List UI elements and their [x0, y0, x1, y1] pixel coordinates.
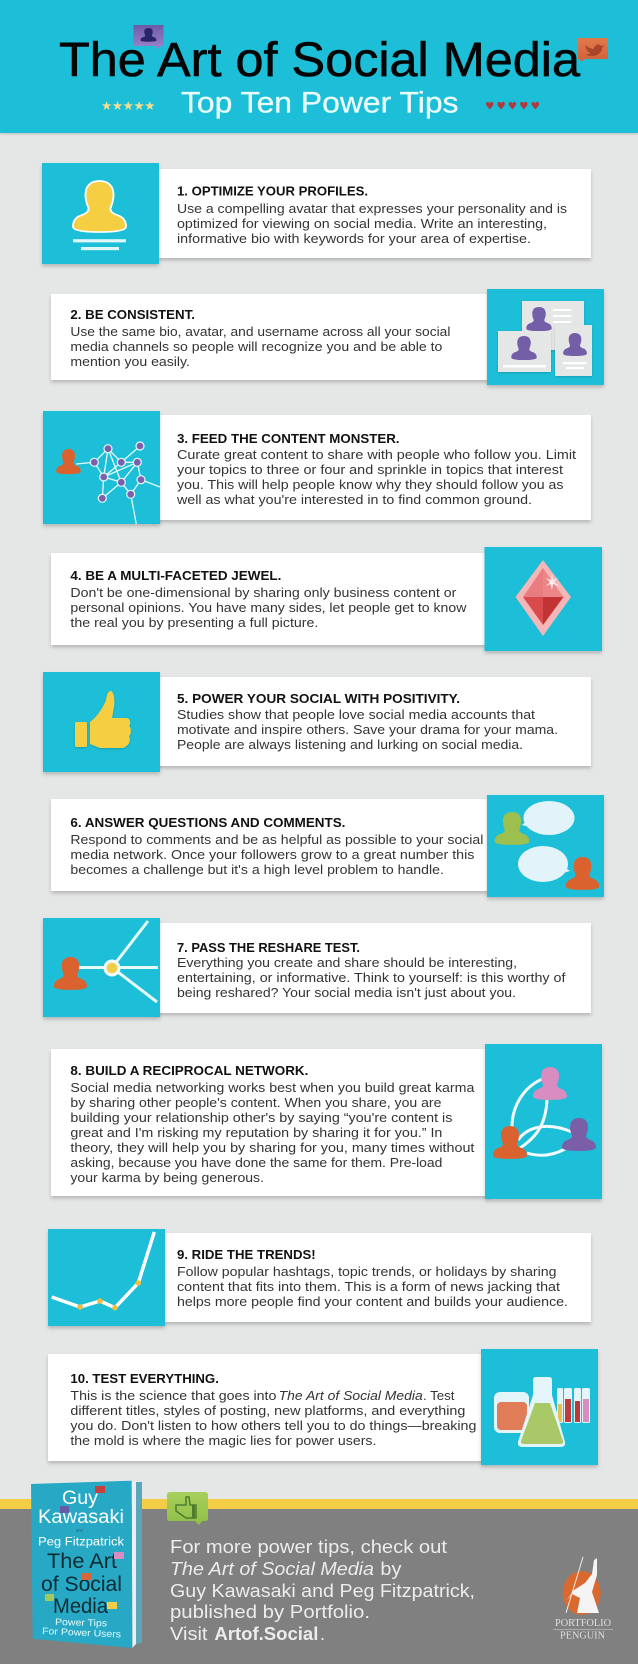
heading: tip 9: 9. RIDE THE TRENDS! [177, 1247, 316, 1262]
text: tip 2 body: media channels so people will recognize you and be able to [70, 339, 442, 354]
text: footer call to action: For more power tips, check out [170, 1537, 447, 1557]
text: tip 9 body: helps more people find your content and builds your audience. [177, 1294, 568, 1309]
text: tip 7 body [177, 955, 566, 1000]
book cover: Media [53, 1595, 108, 1618]
text: tip 8 body: by sharing other people's content. When you share, you are [70, 1095, 441, 1110]
text: footer call to action: . [320, 1624, 325, 1644]
icon: green thumbs-up bubble [167, 1492, 208, 1525]
text: tip 9 body: content that fits into them. This is a form of news jacking that [177, 1279, 560, 1294]
text: tip 10 body: the mold is where the magic lies for power users. [70, 1433, 376, 1448]
panel: footer [0, 1481, 638, 1664]
subtitle: Top Ten Power Tips [181, 86, 458, 120]
icon: jewel [516, 560, 571, 636]
text: tip 5 body: motivate and inspire others. Save your drama for your mama. [177, 722, 558, 737]
logo: Portfolio Penguin: PORTFOLIO [555, 1618, 611, 1629]
heading: tip 3: 3. FEED THE CONTENT MONSTER. [177, 431, 400, 446]
text: tip 6 body: Respond to comments and be as helpful as possible to your social [70, 832, 484, 847]
text: tip 2 body: mention you easily. [70, 354, 190, 369]
book cover: Guy [62, 1488, 99, 1509]
text: tip 1 body [177, 201, 568, 246]
text: footer call to action: The Art of Social Media [170, 1559, 374, 1579]
heading: tip 4: 4. BE A MULTI-FACETED JEWEL. [70, 568, 281, 583]
panel: tip 2 [51, 289, 604, 385]
logo: Portfolio Penguin [553, 1557, 613, 1642]
text: tip 6 body: media network. Once your followers grow to a great number this [70, 847, 475, 862]
text: tip 2 body [70, 324, 451, 369]
text: tip 3 body: well as what you're interested in to find common ground. [176, 492, 532, 507]
text: tip 1 body: Use a compelling avatar that expresses your personality and is [177, 201, 568, 216]
book cover: The Art [47, 1550, 117, 1573]
panel: tip 6 [51, 795, 604, 897]
panel: tip 9 [48, 1229, 591, 1326]
logo: Portfolio Penguin: PENGUIN [560, 1630, 605, 1642]
text: tip 4 body: personal opinions. You have many sides, let people get to know [70, 600, 467, 615]
icon: conversation bubbles [495, 801, 599, 890]
text: tip 5 body [177, 707, 558, 752]
text: tip 3 body: Curate great content to share with people who follow you. Limit [177, 447, 576, 462]
header band [0, 0, 638, 133]
text: footer call to action [170, 1537, 475, 1644]
icon: five stars: ★★★★★ [101, 98, 156, 113]
text: tip 1 body: optimized for viewing on social media. Write an interesting, [177, 216, 547, 231]
icon: content network [56, 442, 160, 524]
heading: tip 5: 5. POWER YOUR SOCIAL WITH POSITIVITY. [177, 691, 460, 706]
book cover: For Power Users [42, 1626, 122, 1640]
text: tip 8 body: asking, because you have done the same for them. Pre-load [70, 1155, 442, 1170]
book cover: of Social [41, 1573, 122, 1596]
icon: thumbs up [75, 691, 131, 748]
text: tip 5 body: Studies show that people love social media accounts that [177, 707, 535, 722]
icon: three profile cards [498, 301, 592, 376]
text: tip 4 body: the real you by presenting a full picture. [70, 615, 318, 630]
panel: tip 5 [43, 672, 591, 772]
text: tip 8 body: building your relationship other's by saying “you're content is [70, 1110, 453, 1125]
text: tip 8 body: theory, they will help you by sharing for you, many times without [70, 1140, 475, 1155]
panel: tip 1 [42, 163, 591, 264]
icon: trend line [52, 1232, 154, 1310]
book cover: Power Tips [55, 1617, 107, 1629]
icon: purple profile bubble [134, 25, 164, 49]
heading: tip 1: 1. OPTIMIZE YOUR PROFILES. [177, 184, 368, 198]
text: tip 10 body [70, 1388, 476, 1448]
text: tip 9 body: Follow popular hashtags, topic trends, or holidays by sharing [177, 1264, 556, 1279]
text: tip 3 body [176, 447, 576, 507]
text: tip 6 body [70, 832, 484, 877]
icon: reciprocal network [493, 1067, 596, 1159]
heading: tip 10: 10. TEST EVERYTHING. [70, 1371, 219, 1386]
text: tip 8 body: Social media networking works best when you build great karma [70, 1080, 475, 1095]
text: tip 8 body [70, 1080, 475, 1185]
bottom white edge [0, 1664, 638, 1665]
text: tip 3 body: your topics to three or four and sprinkle in topics that interest [177, 462, 563, 477]
icon: profile avatar [73, 181, 126, 250]
heading: tip 7: 7. PASS THE RESHARE TEST. [177, 940, 360, 955]
text: footer call to action: published by Portfolio. [170, 1602, 370, 1622]
panel: tip 3 [43, 411, 591, 524]
heading: tip 2: 2. BE CONSISTENT. [70, 307, 195, 322]
text: tip 9 body [177, 1264, 568, 1309]
text: tip 2 body: Use the same bio, avatar, and username across all your social [70, 324, 451, 339]
text: tip 10 body: . Test [423, 1388, 455, 1403]
book cover: and [76, 1528, 83, 1532]
title: The Art of Social Media [59, 34, 580, 87]
icon: orange bird bubble [578, 38, 608, 62]
heading: tip 6: 6. ANSWER QUESTIONS AND COMMENTS. [70, 815, 345, 830]
text: tip 10 body: The Art of Social Media [279, 1388, 423, 1403]
text: tip 10 body: This is the science that goes into [70, 1388, 276, 1403]
text: tip 7 body: Everything you create and share should be interesting, [177, 955, 517, 970]
heading: tip 8: 8. BUILD A RECIPROCAL NETWORK. [70, 1063, 308, 1078]
text: tip 5 body: People are always listening and lurking on social media. [177, 737, 523, 752]
text: footer call to action: Guy Kawasaki and Peg Fitzpatrick, [170, 1581, 475, 1601]
text: tip 4 body [70, 585, 467, 630]
text: tip 7 body: being reshared? Your social media isn't just about you. [177, 985, 516, 1000]
text: tip 6 body: becomes a challenge but it's a high level problem to handle. [70, 862, 444, 877]
text: footer call to action: by [380, 1559, 401, 1579]
text: tip 7 body: entertaining, or informative. Think to yourself: is this worthy of [177, 970, 566, 985]
panel: tip 10 [48, 1349, 598, 1465]
panel: tip 8 [51, 1044, 602, 1199]
text: footer call to action: Visit [170, 1624, 208, 1644]
text: tip 1 body: informative bio with keywords for your area of expertise. [177, 231, 531, 246]
book cover [31, 1481, 142, 1648]
text: footer call to action: Artof.Social [214, 1624, 318, 1644]
text: tip 8 body: great and I'm risking my reputation by sharing it for you.” In [70, 1125, 442, 1140]
icon: lab glassware [494, 1377, 590, 1447]
text: tip 3 body: you. This will help people know why they should follow you as [177, 477, 564, 492]
book cover: Peg Fitzpatrick [38, 1536, 124, 1548]
text: tip 8 body: your karma by being generous. [70, 1170, 264, 1185]
text: tip 10 body: you do. Don't listen to how others tell you to do things—breaking [70, 1418, 476, 1433]
icon: reshare node [54, 921, 158, 1002]
book cover: Kawasaki [38, 1507, 124, 1528]
text: tip 10 body: different titles, styles of posting, new platforms, and everything [70, 1403, 465, 1418]
text: tip 4 body: Don't be one-dimensional by sharing only business content or [70, 585, 457, 600]
icon: five hearts: ♥♥♥♥♥ [485, 100, 540, 112]
panel: tip 7 [43, 918, 591, 1017]
panel: tip 4 [51, 547, 602, 651]
